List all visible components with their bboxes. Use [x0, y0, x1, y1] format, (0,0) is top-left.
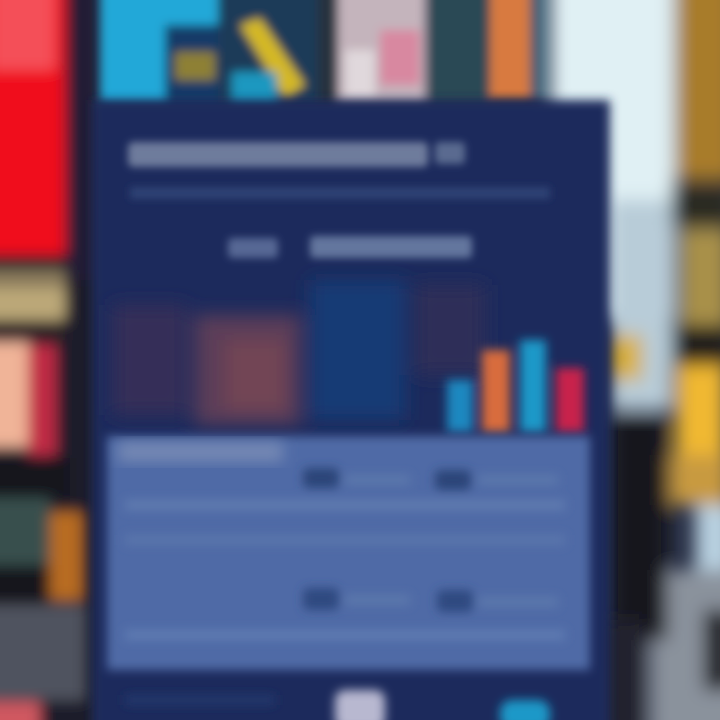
- bar: cyan: [520, 340, 546, 432]
- heading: title line (illegible in reference): [128, 142, 465, 167]
- top billboards: [100, 0, 552, 110]
- icons and text: upper table row: [125, 468, 565, 545]
- panel: lower light-blue data table: [107, 436, 590, 670]
- table header strip: [118, 442, 283, 462]
- icons and text: lower table row: [125, 588, 565, 640]
- footer logos: [125, 690, 550, 720]
- left buildings: [0, 0, 100, 720]
- heading: section label (illegible in reference): [228, 236, 472, 258]
- sky and right buildings: [550, 0, 720, 720]
- bar: orange: [482, 350, 510, 432]
- bar chart: [447, 340, 584, 432]
- bar: crimson: [556, 368, 584, 432]
- text block: subtitle line (illegible in reference): [130, 187, 550, 199]
- bar: blue: [447, 380, 473, 432]
- panel: main navy billboard: [92, 100, 610, 720]
- picture row: three blurred photos: [112, 280, 485, 425]
